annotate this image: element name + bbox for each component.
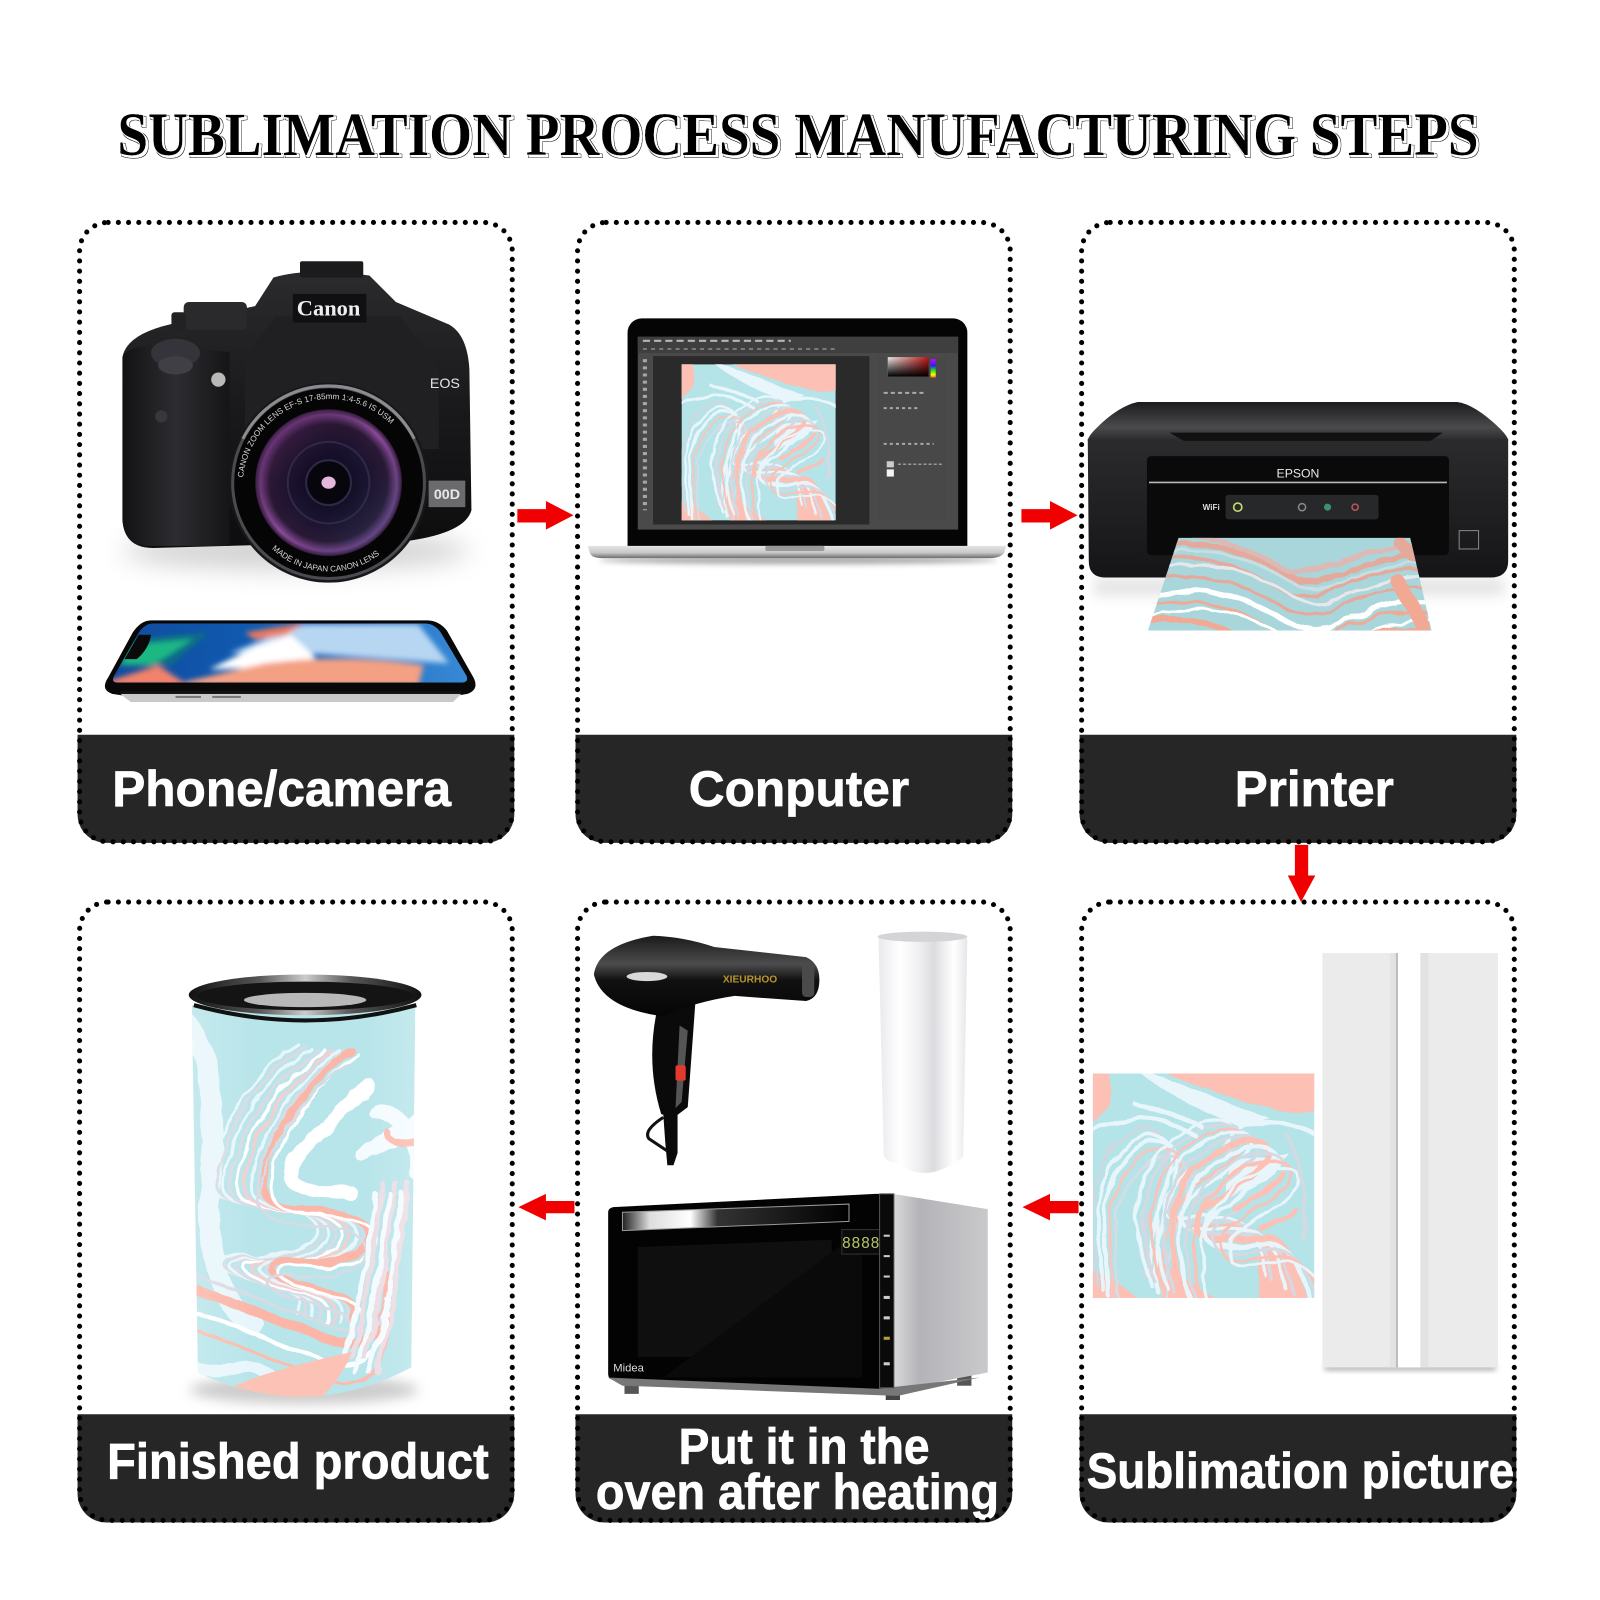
sublimation design on screen — [675, 358, 848, 538]
panel: oven step — [576, 902, 1012, 1522]
computer dotted frame — [578, 222, 1010, 842]
icon: printer: WiFi — [1203, 503, 1220, 512]
icon: printer — [1088, 402, 1508, 631]
icon: camera: CANON ZOOM LENS EF-S 17-85mm 1:4-5.6 IS USM — [238, 394, 394, 477]
sublimation caption bar: Sublimation picture — [1087, 1443, 1514, 1499]
icon: printed tumbler — [184, 974, 423, 1413]
sublimation dotted frame — [1082, 902, 1514, 1520]
icon: laptop — [588, 318, 1006, 564]
oven caption bar — [576, 1414, 1012, 1522]
icon: camera: EOS — [430, 376, 460, 392]
panel: sublimation picture — [1080, 902, 1516, 1522]
phone/camera caption bar — [78, 735, 514, 843]
arrow: sublimation to oven — [1022, 1194, 1079, 1220]
film sheet — [1322, 953, 1498, 1370]
icon: hair dryer — [594, 936, 819, 1165]
oven dotted frame — [578, 902, 1010, 1520]
icon: hair dryer: XIEURHOO — [723, 975, 777, 986]
oven caption bar: Put it in the — [679, 1418, 930, 1474]
printer brand: EPSON — [1277, 467, 1319, 481]
icon: camera — [122, 261, 472, 583]
icon: camera: 00D — [434, 487, 460, 503]
printer caption bar — [1080, 735, 1516, 843]
panel: computer — [576, 222, 1012, 843]
sublimation caption bar — [1080, 1414, 1516, 1522]
sublimation print — [1084, 1064, 1332, 1323]
arrow: computer to printer — [1021, 501, 1078, 530]
phone/camera dotted frame — [80, 222, 512, 842]
icon: camera: MADE IN JAPAN CANON LENS — [272, 545, 379, 572]
phone/camera caption bar: Phone/camera — [112, 761, 452, 817]
arrow: camera to computer — [517, 501, 573, 530]
printer dotted frame — [1082, 222, 1514, 842]
panel: printer — [1080, 222, 1516, 843]
oven caption bar: oven after heating — [596, 1464, 999, 1520]
computer caption bar: Conputer — [689, 761, 909, 817]
printer caption bar: Printer — [1235, 761, 1394, 817]
icon: shrink film roll — [878, 932, 967, 1173]
panel: phone/camera — [77, 220, 515, 844]
finished caption bar: Finished product — [107, 1434, 489, 1490]
computer caption bar — [576, 735, 1012, 843]
arrow: printer to sublimation picture — [1288, 845, 1315, 902]
icon: oven — [608, 1194, 988, 1400]
title: SUBLIMATION PROCESS MANUFACTURING STEPS — [117, 101, 1479, 169]
printed sheet — [1148, 538, 1432, 631]
icon: smartphone — [102, 617, 480, 702]
camera brand: Canon — [297, 295, 361, 320]
finished dotted frame — [80, 902, 512, 1520]
icon: oven: Midea — [613, 1362, 645, 1374]
finished caption bar — [78, 1414, 514, 1522]
arrow: oven to finished product — [518, 1194, 574, 1220]
panel: finished product — [78, 902, 514, 1522]
icon: oven: 8888 — [842, 1235, 880, 1252]
